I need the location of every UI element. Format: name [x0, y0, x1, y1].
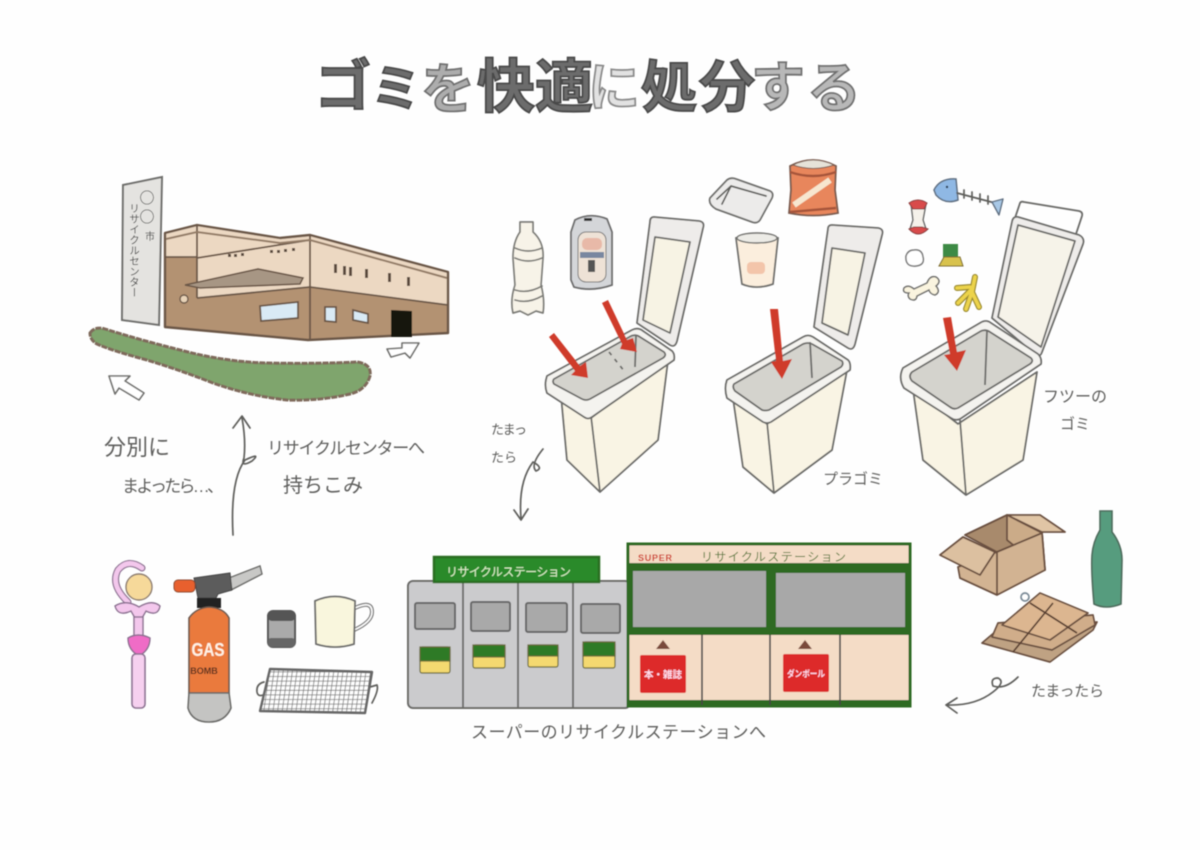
text: when it fills up: たまっ [491, 422, 527, 437]
title: す [751, 43, 805, 122]
lid [637, 217, 704, 346]
item: food scrap [906, 250, 923, 266]
title: る [807, 44, 861, 123]
title: 適 [535, 40, 593, 124]
item: small can [268, 611, 295, 647]
title [315, 40, 861, 124]
item: tied cardboard stack [982, 593, 1097, 662]
label: regular waste: フツーの [1043, 389, 1107, 406]
item: grill mesh [257, 669, 377, 713]
green sign [434, 557, 599, 582]
sign tower: ○ [139, 187, 155, 208]
text: when it fills up [491, 422, 527, 465]
item: banana peel [957, 277, 979, 309]
item: apple core [909, 200, 928, 234]
planting island [90, 328, 370, 400]
text: bring to recycling center [267, 439, 425, 497]
item: gas torch: GAS [192, 640, 224, 660]
label: regular waste [1043, 389, 1107, 433]
recycling center building [165, 225, 448, 340]
item: plastic tray [710, 178, 773, 223]
recycling station: green booth: リサイクルステーション [701, 550, 846, 564]
recycling center building scene [90, 177, 448, 400]
text: when it fills up: たまったら [1031, 683, 1104, 700]
body [561, 360, 668, 492]
title: ゴ [315, 42, 371, 123]
arrow: outline left [109, 376, 144, 400]
label: regular waste: ゴミ [1060, 415, 1090, 433]
arrow [549, 333, 588, 378]
rim [546, 329, 674, 418]
red label: paper: 本・雑誌 [644, 669, 682, 681]
text: unsure about sorting: まよったら…、 [122, 477, 224, 496]
text: bring to recycling center: リサイクルセンターへ [267, 439, 425, 458]
recycling station: green booth [628, 544, 910, 706]
entrance canopy [185, 269, 303, 288]
item: bone [904, 277, 939, 300]
windows [260, 302, 298, 321]
red label: cardboard: ダンボール [787, 668, 825, 679]
arrow: up to recycling center [232, 416, 256, 535]
slot labels [420, 642, 615, 673]
title: 快 [477, 40, 535, 124]
arrow [943, 317, 966, 371]
item: mug [315, 596, 372, 647]
sign tower: リサイクルセンター [128, 203, 140, 298]
item: magical wand [115, 563, 160, 708]
recycling station: green booth: SUPER [638, 553, 672, 563]
arrow: outline right [387, 343, 419, 358]
bin: plastic [726, 225, 882, 493]
text: bring to recycling center: 持ちこみ [283, 474, 363, 497]
item: green bottle [1092, 511, 1122, 607]
sign tower [122, 177, 162, 325]
item: cardboard box [940, 515, 1065, 595]
item: cup noodle [736, 233, 778, 287]
item: gas torch: BOMB [190, 666, 218, 676]
label: plastic waste: プラゴミ [823, 470, 883, 488]
arrow: to the station [946, 677, 1018, 713]
recycling station: gray machines [408, 557, 630, 708]
text: unsure about sorting [104, 435, 224, 496]
title: 処 [641, 43, 697, 124]
text: when it fills up: たら [491, 450, 517, 465]
bin: cans and bottles [546, 217, 704, 492]
item: snack bag [789, 160, 838, 216]
item: beer can [571, 216, 612, 289]
handle [1015, 202, 1082, 234]
arrow [602, 300, 637, 352]
sign tower: 市 [145, 230, 155, 243]
item: gas torch [174, 566, 262, 722]
item: plastic bottle [512, 222, 544, 315]
text: unsure about sorting: 分別に [104, 435, 170, 460]
bin: regular waste [901, 202, 1084, 495]
arrow: down to recycling station [514, 449, 543, 520]
red label: cardboard [783, 654, 829, 692]
green sign: リサイクルステーション [446, 565, 571, 579]
title: ミ [371, 49, 421, 121]
title: を [421, 45, 475, 124]
red label: paper [640, 655, 686, 693]
item: fish bones [934, 179, 1003, 215]
arrow [770, 309, 792, 379]
title: に [588, 46, 640, 121]
title: 分 [699, 43, 755, 124]
caption: to the supermarket recycling station: スーパーのリサイクルステーションへ [471, 723, 766, 742]
item: vegetable scrap [939, 244, 963, 266]
sign tower: ○ [139, 206, 155, 227]
